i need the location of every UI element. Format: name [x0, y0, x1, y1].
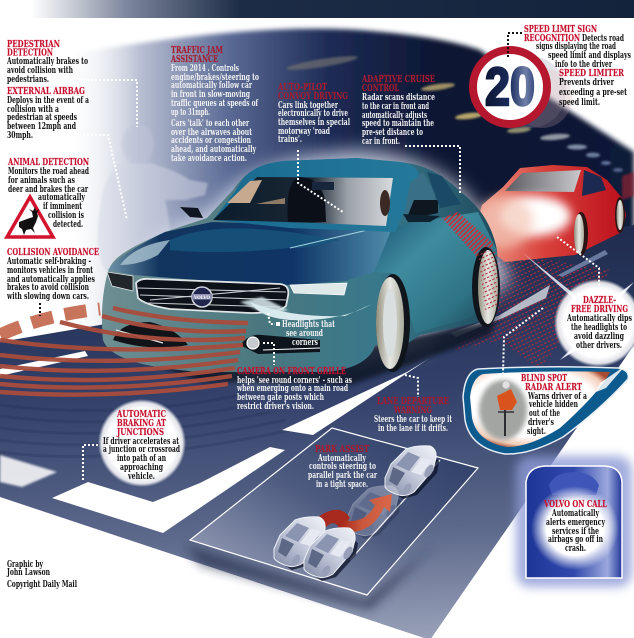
- text: traffic jam assistance: [170, 45, 259, 164]
- tunnel light streaks: [286, 53, 623, 172]
- text: pedestrian detection: avoid collision with: [7, 65, 73, 76]
- speed limit sign: [473, 50, 547, 124]
- text: automatic braking at junctions: a junction or crossroad: [103, 444, 180, 455]
- cyclist photo: [479, 380, 527, 440]
- text: external airbag: between 12mph and: [7, 121, 76, 132]
- text: volvo on call: services if the: [552, 526, 599, 537]
- text: headlights: corners: [292, 337, 318, 348]
- roof: [213, 158, 420, 232]
- side windows: [403, 172, 438, 222]
- text: traffic jam assistance: in front in slow-moving: [171, 89, 250, 100]
- text: collision avoidance: Automatic self-braking -: [6, 256, 91, 267]
- text: speed limit sign recognition: [524, 24, 631, 70]
- white halo around main car: [110, 150, 510, 380]
- air intake: [113, 322, 188, 348]
- white lane stripe across radar: [0, 351, 88, 376]
- text: park assist: Automatically: [317, 453, 366, 464]
- bright bumper sweep: [250, 302, 372, 320]
- text: animal detection: ANIMAL DETECTION: [7, 157, 89, 168]
- car body: [102, 158, 499, 372]
- text: auto-pilot convoy driving: themselves in special: [278, 117, 350, 128]
- red car: [477, 165, 634, 262]
- text: collision avoidance: [6, 247, 99, 302]
- mirrors: [403, 214, 440, 222]
- text: volvo on call: VOLVO ON CALL: [543, 499, 607, 510]
- text: animal detection: detected.: [53, 219, 83, 230]
- text: pedestrian detection: pedestrians.: [7, 74, 49, 85]
- blind spot mirror: [463, 366, 628, 454]
- text: automatic braking at junctions: into path of an: [117, 453, 166, 464]
- road ripple bands: [0, 395, 300, 457]
- text: traffic jam assistance: TRAFFIC JAM: [171, 45, 223, 56]
- text: automatic braking at junctions: BRAKING AT: [117, 418, 167, 429]
- text: adaptive cruise control: car in front.: [362, 136, 400, 147]
- parking bay panel: [185, 428, 478, 610]
- text: automatic braking at junctions: AUTOMATIC: [116, 409, 166, 420]
- volvo badge: [192, 287, 212, 307]
- red halftone radar under red car: [455, 250, 610, 370]
- volvo on call panel: [516, 456, 632, 587]
- text: external airbag: 30mph.: [7, 130, 33, 141]
- text: animal detection: deer and brakes the car: [8, 184, 88, 195]
- text: speed limit sign recognition: RECOGNITION: [524, 33, 580, 44]
- front radar arcs: [0, 308, 248, 395]
- text: lane departure warning: Steers the car to keep it: [374, 414, 452, 425]
- text: auto-pilot convoy driving: trains'.: [278, 134, 302, 145]
- parked car rear right: [304, 528, 358, 581]
- text: collision avoidance: monitors vehicles in front: [7, 265, 93, 276]
- text: auto-pilot convoy driving: AUTO-PILOT: [277, 82, 328, 93]
- text: automatic braking at junctions: If driver accelerates at: [103, 436, 179, 447]
- text: volvo on call: airbags go off in: [548, 534, 603, 545]
- speed sign echoes: [494, 56, 572, 128]
- text: automatic braking at junctions: [103, 409, 180, 482]
- text: animal detection: automatically: [38, 192, 85, 203]
- text: automatic braking at junctions: vehicle.: [127, 471, 155, 482]
- text: volvo on call: crash.: [565, 543, 586, 554]
- text: adaptive cruise control: ADAPTIVE CRUISE: [361, 74, 435, 85]
- text: animal detection: for animals such as: [8, 175, 75, 186]
- text: animal detection: if imminent: [43, 201, 82, 212]
- speed limit sign: 20: [485, 57, 535, 117]
- dotted leader lines: [40, 33, 599, 480]
- ghost car: [347, 486, 401, 539]
- text: adaptive cruise control: Radar scans distance: [362, 92, 435, 103]
- text: speed limiter: [559, 68, 628, 108]
- lane markings: [0, 250, 608, 533]
- text: collision avoidance: with slowing down cars.: [6, 291, 89, 302]
- text: volvo on call: alerts emergency: [546, 517, 605, 528]
- credits: Copyright Daily Mail: [7, 579, 77, 590]
- text: dazzle-free driving: [566, 295, 632, 351]
- text: blind spot radar alert: RADAR ALERT: [525, 382, 583, 393]
- radar wedges on the road edge: [0, 309, 100, 335]
- text: blind spot radar alert: sight.: [527, 426, 546, 437]
- text: traffic jam assistance: From 2014 . Controls: [171, 63, 239, 74]
- text: pedestrian detection: Automatically brakes to: [6, 56, 88, 67]
- top dark band: [0, 0, 634, 18]
- text: traffic jam assistance: ASSISTANCE: [170, 54, 218, 65]
- text: traffic jam assistance: Cars 'talk' to each other: [171, 118, 249, 129]
- text: camera on front grille: [236, 366, 352, 412]
- text: camera on front grille: CAMERA ON FRONT GRILLE: [237, 366, 346, 377]
- text: traffic jam assistance: automatically follow car: [171, 80, 252, 91]
- text: traffic jam assistance: take avoidance action.: [171, 153, 247, 164]
- text: traffic jam assistance: over the airwaves about: [171, 127, 252, 138]
- text: lane departure warning: LANE DEPARTURE: [377, 396, 449, 407]
- text: lane departure warning: in the lane if it drifts.: [378, 423, 448, 434]
- text: collision avoidance: and automatically applies: [7, 274, 95, 285]
- text: blind spot radar alert: out of the: [529, 408, 560, 419]
- text: external airbag: pedestrian at speeds: [7, 112, 77, 123]
- text: automatic braking at junctions: approaching: [120, 462, 163, 473]
- volvo badge: VOLVO: [193, 296, 210, 301]
- text: blind spot radar alert: [521, 373, 587, 437]
- text: camera on front grille: restrict driver's vision.: [237, 401, 314, 412]
- windshield: [213, 177, 393, 226]
- text: animal detection: collision is: [48, 210, 84, 221]
- text: dazzle-free driving: DAZZLE-: [583, 295, 616, 306]
- text: auto-pilot convoy driving: electronically to drive: [278, 108, 348, 119]
- front wheel: [376, 274, 410, 372]
- text: auto-pilot convoy driving: Cars link together: [278, 100, 338, 111]
- text: volvo on call: [543, 499, 607, 554]
- text: lane departure warning: [374, 396, 452, 434]
- parked car upper: [385, 446, 439, 499]
- headlight right: [290, 283, 347, 295]
- side hatch radar: [442, 212, 493, 262]
- text: headlights: [282, 319, 335, 348]
- text: pedestrian detection: [6, 39, 88, 85]
- text: park assist: [308, 444, 377, 490]
- text: animal detection: [7, 157, 89, 230]
- text: headlights: see around: [286, 328, 323, 339]
- text: external airbag: collision with a: [7, 104, 59, 115]
- text: park assist: parallel park the car: [308, 470, 377, 481]
- text: collision avoidance: brakes to avoid collision: [7, 282, 89, 293]
- deer warning triangle: [7, 197, 53, 237]
- text: animal detection: Monitors the road ahead: [8, 166, 89, 177]
- text: adaptive cruise control: to the car in front and: [362, 101, 429, 112]
- text: auto-pilot convoy driving: [277, 82, 350, 145]
- arrow turning into space: [318, 494, 392, 532]
- car shadow: [110, 300, 506, 385]
- text: speed limiter: speed limit.: [559, 97, 600, 108]
- text: blind spot radar alert: Warns driver of a: [527, 391, 587, 402]
- text: camera on front grille: helps 'see round corners' - such as: [237, 375, 352, 386]
- text: traffic jam assistance: engine/brakes/steering to: [171, 72, 259, 83]
- rear wheel: [472, 247, 500, 327]
- text: blind spot radar alert: BLIND SPOT: [521, 373, 568, 384]
- text: pedestrian detection: PEDESTRIAN: [7, 39, 60, 50]
- text: camera on front grille: between gate posts which: [237, 392, 324, 403]
- text: park assist: in a tight space.: [316, 479, 368, 490]
- text: headlights: Headlights that: [282, 319, 335, 330]
- text: adaptive cruise control: automatically adjusts: [362, 110, 427, 121]
- text: blind spot radar alert: vehicle hidden: [528, 399, 578, 410]
- dazzle circle with rays: [523, 253, 634, 367]
- text: camera on front grille: when emerging onto a main road: [236, 383, 348, 394]
- text: adaptive cruise control: [361, 74, 435, 147]
- text: external airbag: EXTERNAL AIRBAG: [7, 86, 85, 97]
- text: automatic braking at junctions: JUNCTIONS: [116, 427, 164, 438]
- text: traffic jam assistance: up to 31mph.: [171, 107, 210, 118]
- text: adaptive cruise control: speed to maintain the: [362, 118, 434, 129]
- camera pod: [240, 335, 320, 354]
- parked car rear left: [274, 517, 328, 570]
- text: external airbag: Deploys in the event of a: [7, 95, 89, 106]
- text: adaptive cruise control: pre-set distance to: [362, 127, 423, 138]
- junction circle: [98, 399, 186, 487]
- credits: Graphic by: [7, 559, 43, 570]
- grille: [136, 279, 288, 313]
- main car: [102, 158, 506, 385]
- text: blind spot radar alert: driver's: [528, 417, 554, 428]
- text: auto-pilot convoy driving: motorway 'road: [278, 126, 330, 137]
- text: speed limit sign recognition: SPEED LIMIT SIGN: [524, 24, 597, 35]
- text: external airbag: [7, 86, 89, 141]
- mirror glint: [596, 366, 625, 392]
- credits: [6, 559, 77, 590]
- text: traffic jam assistance: traffic queues at speeds of: [171, 98, 259, 109]
- text: adaptive cruise control: CONTROL: [362, 83, 399, 94]
- text: collision avoidance: COLLISION AVOIDANCE: [7, 247, 99, 258]
- text: auto-pilot convoy driving: CONVOY DRIVING: [278, 91, 348, 102]
- headlight left: [107, 272, 133, 291]
- text: traffic jam assistance: accidents or congestion: [171, 135, 251, 146]
- ghost pedestrian: [98, 124, 208, 300]
- car side panel: [372, 212, 499, 333]
- text: park assist: PARK ASSIST: [315, 444, 370, 455]
- text: pedestrian detection: DETECTION: [7, 48, 53, 58]
- hood: [108, 222, 392, 285]
- credits: John Lawson: [6, 567, 50, 578]
- text: lane departure warning: WARNING: [393, 405, 432, 416]
- road surface: [0, 225, 634, 638]
- text: volvo on call: Automatically: [551, 508, 599, 519]
- tunnel sky backdrop: [0, 29, 634, 345]
- text: traffic jam assistance: ahead, and automatically: [171, 144, 256, 155]
- text: park assist: controls steering to: [309, 461, 376, 472]
